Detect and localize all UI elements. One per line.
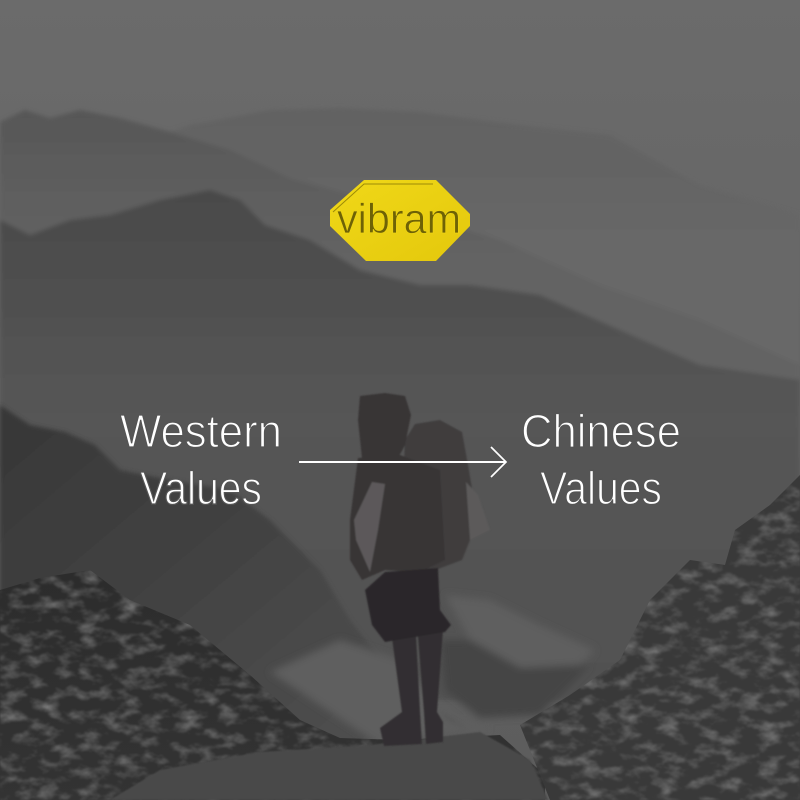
text: Chinese Values: Chinese xyxy=(521,405,681,457)
hiker: right leg and boot xyxy=(418,630,443,744)
hiker: bare arm xyxy=(354,482,385,572)
text: Chinese Values xyxy=(521,405,681,514)
text: Western Values xyxy=(120,405,282,514)
photo: rocky foreground left xyxy=(0,570,545,800)
text: Western Values: Values xyxy=(140,462,262,514)
arrow xyxy=(299,447,506,477)
text: Western Values: Western xyxy=(120,405,282,457)
text: Chinese Values: Values xyxy=(540,462,662,514)
photo: rock ledge xyxy=(110,732,548,800)
hiker: pack side pocket xyxy=(466,482,490,540)
photo: valley and lake xyxy=(270,595,595,745)
hiker silhouette xyxy=(350,393,490,746)
hiker: hood and head xyxy=(358,393,411,460)
hiker: backpack xyxy=(400,420,474,572)
photo: rocky cliff right xyxy=(520,475,800,800)
logo: Vibram yellow octagon badge xyxy=(330,180,470,261)
photo: mid dark slope left xyxy=(0,405,470,800)
logo: wordmark: vibram xyxy=(337,195,461,242)
hiker: left leg and boot xyxy=(380,636,422,746)
hiker: shorts xyxy=(365,568,451,642)
hiker: torso xyxy=(350,455,445,580)
photo: far mountain ridges xyxy=(0,108,800,700)
